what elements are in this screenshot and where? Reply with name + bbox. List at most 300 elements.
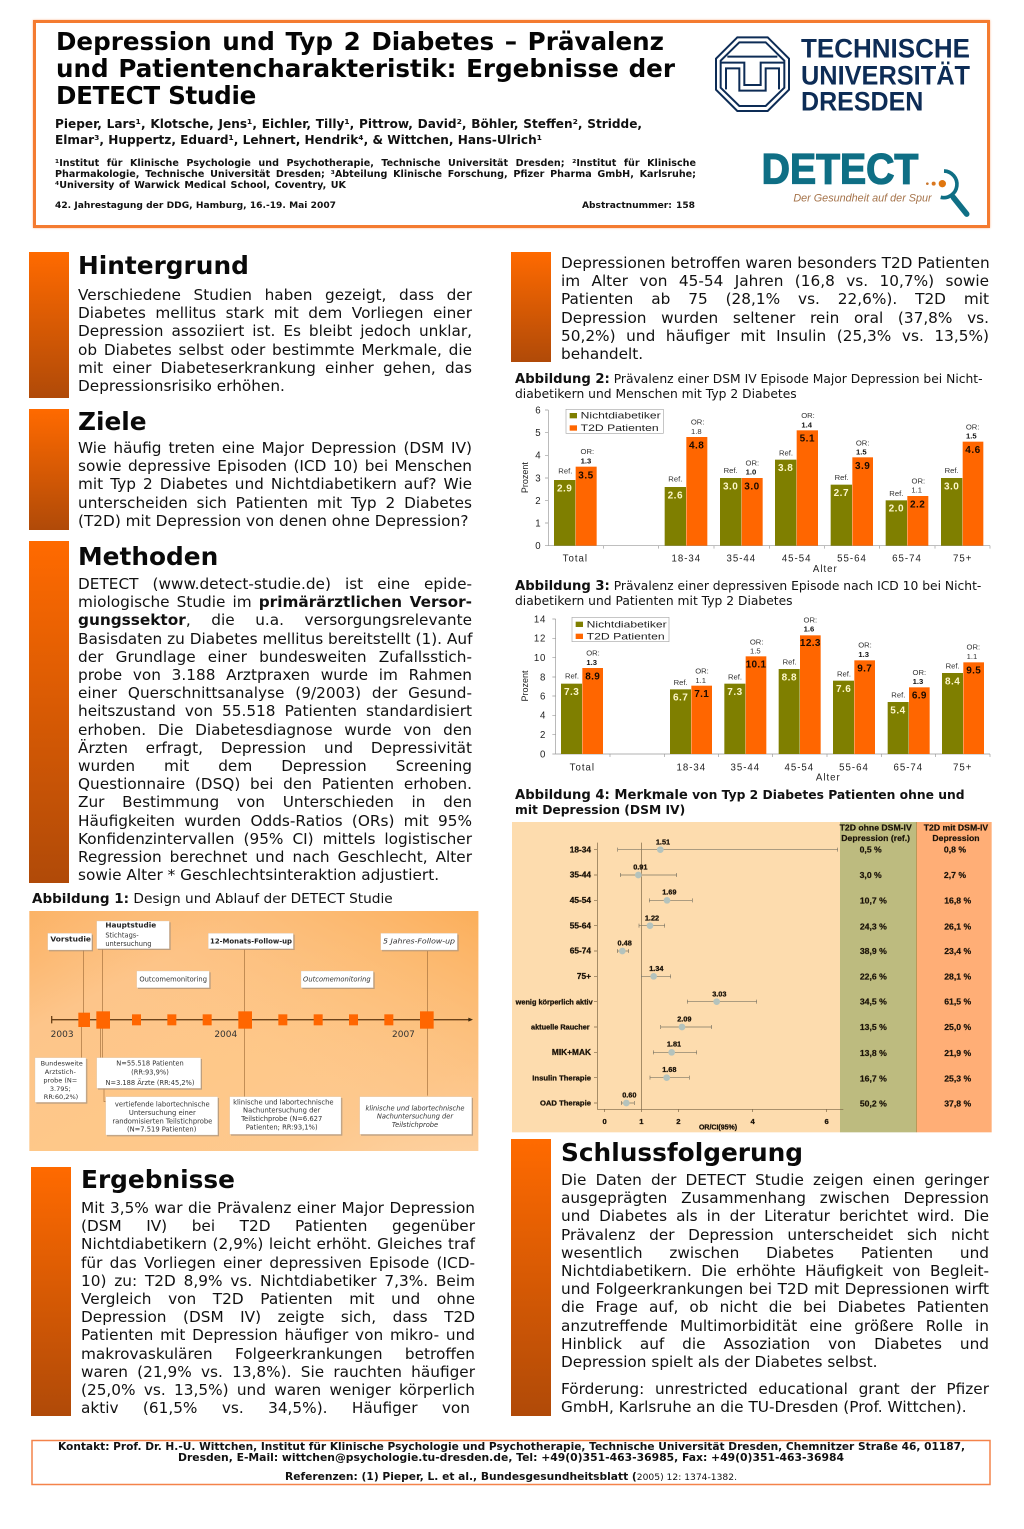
text: Hintergrund: Depression assoziiert ist. Es bleibt jedoch unklar, (78, 322, 472, 340)
column: T2D mit Depression: 37,8 % (944, 1099, 971, 1109)
bar chart: Abbildung 3: 8.9 (585, 671, 600, 682)
forest plot: Abbildung 4: 2.09 (677, 1014, 691, 1023)
text: Hintergrund: ob Diabetes selbst oder bestimmte Merkmale, die (78, 341, 472, 359)
bar chart: Abbildung 3: 1.6 (804, 625, 814, 634)
box: Hauptstudie (105, 921, 156, 948)
caption: Abbildung 3: Abbildung 3: Prävalenz einer depressiven Episode nach ICD 10 bei Nicht- (515, 579, 981, 594)
column: T2D mit Depression: 61,5 % (944, 997, 971, 1007)
text: Ergebnisse (81, 1199, 476, 1417)
text: Methoden: Ärzten erfragt, Depression und Depressivität (78, 739, 472, 757)
text: Hintergrund: Verschiedene Studien haben gezeigt, dass der (78, 286, 472, 304)
column: T2D ohne Depression: 0,5 % (860, 845, 882, 855)
box: vertiefende Untersuchung: randomisierten Teilstichprobe (112, 1117, 212, 1125)
column: T2D mit Depression: 25,3 % (944, 1073, 971, 1083)
text: Ziele: unterscheiden sich Patienten mit Typ 2 Diabetes (78, 494, 472, 512)
legend: Nichtdiabetiker (581, 411, 661, 421)
bar chart: Abbildung 3: 2 (540, 730, 546, 741)
box: klinische Nachuntersuchung (italic): Nachuntersuchung der (377, 1113, 454, 1121)
bar chart: Abbildung 3: 35-44 (730, 762, 760, 773)
bar chart: Abbildung 3: Ref. (891, 690, 905, 699)
bar chart: Abbildung 2: 3.0 (944, 481, 959, 492)
forest plot: Abbildung 4: 1.34 (649, 964, 664, 973)
text: Methoden: Regression berechnet und nach Geschlecht, Alter (78, 848, 472, 866)
column: T2D mit Depression: 0,8 % (944, 845, 966, 855)
bar chart: Abbildung 3: 45-54 (784, 762, 814, 773)
bar chart: Abbildung 3: OR: (804, 616, 817, 625)
forest plot: Abbildung 4: 18-34 (570, 844, 591, 854)
bar chart: Abbildung 2: Alter (813, 564, 838, 575)
authors: Elmar³, Huppertz, Eduard¹, Lehnert, Hendrik⁴, & Wittchen, Hans-Ulrich¹ (55, 132, 542, 146)
bar chart: Abbildung 2: 75+ (953, 554, 972, 565)
column: T2D mit Depression: 23,4 % (944, 946, 971, 956)
header panel (33, 20, 990, 228)
forest plot: Abbildung 4: 75+ (577, 971, 591, 981)
bar chart: Abbildung 3: OR: (695, 666, 709, 675)
text: Ergebnisse: (DSM IV) bei T2D Patienten gegenüber (81, 1217, 475, 1235)
bar chart: Abbildung 2: 2.2 (910, 499, 925, 510)
forest plot: Abbildung 4: 1.68 (662, 1065, 676, 1074)
box: Bundesweite Arztstichprobe: Arztstich- (45, 1068, 77, 1076)
bar chart: Abbildung 3: 12.3 (800, 638, 821, 649)
text: Schlussfolgerung: die Frage auf, ob nicht die bei Diabetes Patienten (561, 1298, 989, 1316)
text: Ziele: sowie depressive Episoden (ICD 10) bei Menschen (78, 457, 472, 475)
forest plot: Abbildung 4: 3.03 (712, 989, 726, 998)
bar chart: Abbildung 2: Ref. (558, 467, 572, 476)
logo: DETECT (762, 145, 970, 217)
bar chart: Abbildung 2: 1.3 (581, 456, 591, 465)
heading: Hintergrund: Hintergrund (78, 251, 249, 280)
box: 12-Monats-Follow-up: 12-Monats-Follow-up (210, 937, 292, 945)
logo: TU Dresden (715, 34, 970, 117)
text: Methoden: der Grundlage einer bundesweiten Zufallsstich- (78, 648, 472, 666)
bar chart: Abbildung 3: 8.4 (945, 676, 960, 687)
title: DETECT Studie (56, 81, 256, 110)
bar chart: Abbildung 2: OR: (746, 458, 759, 467)
text: Schlussfolgerung: Die Daten der DETECT Studie zeigen einen geringer (561, 1171, 989, 1189)
box: klinische Nachuntersuchung (italic) (365, 1104, 465, 1129)
forest plot: Abbildung 4: 1 (639, 1117, 644, 1126)
column: T2D ohne Depression: 3,0 % (860, 870, 882, 880)
box: Bundesweite Arztstichprobe: 3.795; (50, 1085, 71, 1093)
timeline axis: 2007 (392, 1030, 415, 1040)
text: Hintergrund: Depressionsrisiko erhöhen. (78, 377, 285, 395)
accent bar: Ergebnisse (31, 1167, 71, 1416)
text: Ziele: Wie häufig treten eine Major Depression (DSM IV) (78, 439, 472, 457)
column: T2D ohne Depression: 34,5 % (860, 997, 887, 1007)
text: Ziele: mit Typ 2 Diabetes und Nichtdiabetikern auf? Wie (78, 475, 472, 493)
bar chart: Abbildung 3: Ref. (946, 662, 960, 671)
forest plot: Abbildung 4: 1.81 (667, 1040, 681, 1049)
forest plot: Abbildung 4: 1.51 (656, 837, 670, 846)
bar chart: Abbildung 2: 3.8 (778, 463, 793, 474)
box: Bundesweite Arztstichprobe: probe (N= (43, 1077, 77, 1085)
bar chart: Abbildung 2: Ref. (835, 473, 849, 482)
text: Schlussfolgerung: wesentlich zwischen Diabetes Patienten und (561, 1244, 989, 1262)
text: Schlussfolgerung: und Diabetes als in der Literatur berichtet wird. Die (561, 1207, 989, 1225)
text: Ergebnisse: Depression (DSM IV) zeigte sich, dass T2D (81, 1308, 475, 1326)
forest plot: Abbildung 4: 0.60 (622, 1090, 636, 1099)
bar chart: Abbildung 3: 7.1 (694, 689, 709, 700)
text: Methoden: Basisdaten zu Diabetes mellitus bereitstellt (1). Auf (78, 630, 472, 648)
box: klinische Nachuntersuchung (233, 1098, 334, 1132)
bar chart: Abbildung 2: 1.5 (966, 432, 977, 441)
text: Schlussfolgerung: Hinblick auf die Assoziation von Diabetes und (561, 1335, 989, 1353)
text: Methoden: sowie Alter * Geschlechtsinteraktion adjustiert. (78, 866, 439, 884)
bar chart: Abbildung 2: 1.8 (691, 427, 702, 436)
bar chart: Abbildung 3: 7.3 (564, 687, 579, 698)
forest plot: Abbildung 4: 1.22 (645, 913, 659, 922)
bar chart: Abbildung 2: 5.1 (800, 434, 815, 445)
column: T2D ohne Depression: 13,8 % (860, 1048, 887, 1058)
bar chart: Abbildung 2: OR: (801, 411, 815, 420)
bar chart: Abbildung 3: 4 (540, 711, 546, 722)
heading: Ergebnisse: Ergebnisse (81, 1165, 235, 1194)
forest plot: Abbildung 4: 45-54 (570, 895, 591, 905)
bar chart: Abbildung 2: 18-34 (671, 554, 701, 565)
text: Methoden: einer Querschnittsanalyse (9/2003) der Gesund- (78, 684, 472, 702)
forest plot: Abbildung 4: 4 (751, 1117, 756, 1126)
column: T2D mit Depression: Depression (932, 833, 980, 843)
accent bar: Ergebnisse continued (511, 252, 551, 362)
forest plot: Abbildung 4: 0.91 (633, 862, 647, 871)
bar chart: Abbildung 2 (520, 405, 990, 575)
column: T2D ohne Depression: Depression (ref.) (841, 833, 910, 843)
column: T2D mit Depression: 28,1 % (944, 971, 971, 981)
column: T2D ohne Depression: 10,7 % (860, 895, 887, 905)
bar chart: Abbildung 2: OR: (691, 418, 704, 427)
forest plot: Abbildung 4: 35-44 (570, 870, 591, 880)
box: Bundesweite Arztstichprobe (41, 1060, 83, 1101)
bar chart: Abbildung 2: 3.0 (744, 481, 760, 492)
title (56, 27, 675, 110)
bar chart: Abbildung 3: Prozent (520, 670, 530, 702)
box: Bundesweite Arztstichprobe: RR:60,2%) (44, 1093, 78, 1101)
heading: Methoden: Methoden (78, 542, 218, 571)
box: vertiefende Untersuchung: (N=7.519 Patienten) (127, 1126, 197, 1134)
caption: Abbildung 4 (515, 788, 965, 817)
bar chart: Abbildung 3: 65-74 (893, 762, 923, 773)
text: Schlussfolgerung: und Folgeerkrankungen bei T2D mit Depressionen wirft (561, 1280, 989, 1298)
column: T2D ohne Depression (840, 823, 912, 1109)
text: Schlussfolgerung (561, 1171, 990, 1371)
forest plot: Abbildung 4: aktuelle Raucher (531, 1023, 590, 1032)
bar chart: Abbildung 2: 0 (535, 541, 541, 552)
column: T2D ohne Depression: 38,9 % (860, 946, 887, 956)
text: Hintergrund: mit einer Diabeteserkrankung einher gehen, das (78, 359, 472, 377)
box: N=55.518 Patienten: N=55.518 Patienten (116, 1060, 184, 1068)
forest plot: Abbildung 4 (512, 822, 992, 1132)
bar chart: Abbildung 3: Ref. (783, 658, 797, 667)
references: Referenzen: (1) Pieper, L. et al., Bundesgesundheitsblatt ( 2005) 12: 1374-1382. (285, 1471, 737, 1483)
text: Methoden: probe von 3.188 Arztpraxen wurde im Rahmen (78, 666, 472, 684)
bar chart: Abbildung 2: OR: (581, 447, 594, 456)
legend (572, 617, 669, 642)
caption: Abbildung 2 (515, 372, 983, 401)
affiliations (55, 158, 696, 191)
bar chart: Abbildung 2: Ref. (779, 448, 793, 457)
bar chart: Abbildung 3: 1.3 (586, 658, 597, 667)
text: Hintergrund (78, 286, 472, 395)
bar chart: Abbildung 3: Ref. (728, 672, 742, 681)
contact: Kontakt: Prof. Dr. H.-U. Wittchen, Institut für Klinische Psychologie und Psychotherapie, Technische Universität Dresden, Chemnitzer Straße 46, 01187, (58, 1441, 965, 1453)
forest plot: Abbildung 4: wenig körperlich aktiv (515, 997, 594, 1006)
bar chart: Abbildung 2: Total (563, 554, 588, 565)
accent bar: Schlussfolgerung (511, 1139, 551, 1416)
footer panel (31, 1440, 991, 1486)
text: Schlussfolgerung: Nichtdiabetikern. Die erhöhte Häufigkeit von Begleit- (561, 1262, 989, 1280)
odds ratio markers (619, 846, 720, 1106)
bar chart: Abbildung 2: 65-74 (892, 554, 922, 565)
bar chart: Abbildung 2: OR: (966, 422, 979, 431)
affiliations: ⁴University of Warwick Medical School, Coventry, UK (55, 180, 346, 191)
bar chart: Abbildung 3: 6.9 (912, 691, 927, 702)
bar chart: Abbildung 3: OR: (750, 637, 763, 646)
bar chart: Abbildung 2: Ref. (724, 466, 738, 475)
box: N=55.518 Patienten: (RR:93,9%) (131, 1068, 169, 1076)
authors (55, 117, 642, 146)
bar chart: Abbildung 2: 3.0 (723, 481, 738, 492)
bar chart: Abbildung 2: 3 (535, 473, 541, 484)
abstract number: Abstractnummer: 158 (582, 201, 695, 211)
text: Ergebnisse: aktiv (61,5% vs. 34,5%). Häufiger von (81, 1399, 470, 1417)
column: T2D ohne Depression: 22,6 % (860, 971, 887, 981)
text: Methoden: DETECT (www.detect-studie.de) ist eine epide- (78, 575, 472, 593)
forest plot: Abbildung 4: 55-64 (570, 920, 591, 930)
bar chart: Abbildung 3: Ref. (674, 678, 688, 687)
box: 5 Jahres-Follow-up: 5 Jahres-Follow-up (383, 938, 456, 946)
text: Ergebnisse: Nichtdiabetikern (2,9%) leicht erhöht. Gleiches traf (81, 1235, 475, 1253)
text: Ergebnisse: für das Vorliegen einer depressiven Episode (ICD- (81, 1254, 475, 1272)
bar chart: Abbildung 3: OR: (967, 643, 980, 652)
text: Ergebnisse continued: behandelt. (561, 345, 643, 363)
bar chart: Abbildung 3: 55-64 (839, 762, 869, 773)
bar chart: Abbildung 2: Ref. (945, 466, 959, 475)
text: Ergebnisse: Patienten mit Depression häufiger von mikro- und (81, 1326, 475, 1344)
bar chart: Abbildung 3: 6 (540, 691, 546, 702)
affiliations: ¹Institut für Klinische Psychologie und Psychotherapie, Technische Universität Dresden; ²Institut für Klinische (55, 158, 696, 169)
bar chart: Abbildung 3: 5.4 (890, 705, 906, 716)
flow diagram: DETECT design timeline (29, 911, 478, 1151)
box: klinische Nachuntersuchung: Nachuntersuchung der (243, 1107, 321, 1115)
text: Schlussfolgerung: anzutreffende Multimorbidität eine größere Rolle in (561, 1317, 989, 1335)
column: T2D ohne Depression: 24,3 % (860, 921, 887, 931)
forest plot: Abbildung 4: 2 (676, 1117, 680, 1126)
forest plot: Abbildung 4: Insulin Therapie (532, 1073, 591, 1082)
column: T2D mit Depression: 16,8 % (944, 895, 971, 905)
box: klinische Nachuntersuchung: Teilstichprobe (N=6.627 (240, 1115, 322, 1123)
text: Ergebnisse: (25,0% vs. 13,5%) und waren weniger körperlich (81, 1381, 475, 1399)
contact: Dresden, E-Mail: wittchen@psychologie.tu-dresden.de, Tel: +49(0)351-463-36985, Fax: +49(0)351-463-36984 (178, 1452, 844, 1464)
text: Ergebnisse continued: 50,2%) und häufiger mit Insulin (25,3% vs. 13,5%) (561, 327, 989, 345)
bar chart: Abbildung 2: 1.4 (801, 420, 813, 429)
box: Outcomemonitoring (italic): Outcomemonitoring (303, 976, 371, 984)
bar chart: Abbildung 3: 9.5 (966, 666, 981, 677)
box: klinische Nachuntersuchung: klinische und labortechnische (233, 1098, 334, 1106)
bar chart: Abbildung 3: OR: (858, 641, 872, 650)
forest plot: Abbildung 4: 0 (603, 1117, 607, 1126)
bar chart: Abbildung 3: 14 (534, 614, 546, 625)
logo: TU Dresden: TECHNISCHE (801, 34, 970, 64)
bar chart: Abbildung 3: Total (570, 762, 595, 773)
bar chart: Abbildung 3: 1.3 (858, 650, 869, 659)
bar chart: Abbildung 3: 12 (534, 634, 546, 645)
text: Ergebnisse continued: im Alter von 45-54 Jahren (16,8 vs. 10,7%) sowie (561, 272, 989, 290)
bar chart: Abbildung 2: 35-44 (726, 554, 756, 565)
bar chart: Abbildung 3: 9.7 (857, 664, 872, 675)
box: vertiefende Untersuchung (112, 1101, 212, 1134)
text: Ergebnisse continued: Depressionen betroffen waren besonders T2D Patienten (561, 254, 990, 272)
timeline axis: 2003 (51, 1030, 74, 1040)
text: Ziele: (T2D) mit Depression von denen ohne Depression? (78, 512, 468, 530)
text: Ergebnisse continued (561, 254, 990, 363)
accent bar: Methoden (29, 541, 69, 883)
logo: TU Dresden: DRESDEN (801, 87, 923, 117)
text: Methoden: Häufigkeiten wurden Odds-Ratios (ORs) mit 95% (78, 812, 472, 830)
bar chart: Abbildung 3: 7.6 (836, 684, 851, 695)
text: Förderung: GmbH, Karlsruhe an die TU-Dresden (Prof. Wittchen). (561, 1398, 967, 1416)
logo: DETECT: DETECT (762, 145, 918, 193)
text: Methoden: heitszustand von 55.518 Patienten standardisiert (78, 702, 472, 720)
bar chart: Abbildung 3: Ref. (837, 669, 851, 678)
text: Methoden (78, 575, 473, 884)
forest plot: Abbildung 4: OR/CI(95%) (699, 1125, 737, 1132)
forest plot: Abbildung 4: 0.48 (618, 938, 632, 947)
text: Ergebnisse continued: Patienten ab 75 (28,1% vs. 22,6%). T2D mit (561, 290, 989, 308)
text: Schlussfolgerung: Depression spielt als der Diabetes selbst. (561, 1353, 877, 1371)
box: klinische Nachuntersuchung (italic): klinische und labortechnische (365, 1104, 465, 1112)
caption: Abbildung 3: diabetikern und Patienten mit Typ 2 Diabetes (515, 594, 793, 608)
box: klinische Nachuntersuchung (italic): Teilstichprobe (392, 1121, 438, 1129)
text: Methoden: erhoben. Die Diabetesdiagnose wurde von den (78, 721, 472, 739)
bar chart: Abbildung 3: 1.3 (913, 677, 923, 686)
bar chart: Abbildung 3: OR: (586, 649, 600, 658)
column: T2D ohne Depression: 50,2 % (860, 1099, 887, 1109)
bar chart: Abbildung 3: 1.5 (750, 647, 761, 656)
bar chart: Abbildung 2: 4.8 (689, 440, 704, 451)
timeline axis: 2004 (214, 1030, 238, 1040)
bar chart: Abbildung 3: 0 (540, 749, 546, 760)
caption: Abbildung 1: Abbildung 1: Design und Ablauf der DETECT Studie (32, 891, 393, 907)
bar chart: Abbildung 2: 3.9 (855, 461, 870, 472)
logo: DETECT: Der Gesundheit auf der Spur (793, 193, 933, 205)
bar chart: Abbildung 3: 10.1 (746, 660, 767, 671)
confidence intervals (617, 848, 838, 1105)
text: Förderung: Förderung: unrestricted educational grant der Pfizer (561, 1380, 989, 1398)
bar chart: Abbildung 2: 55-64 (837, 554, 867, 565)
box: vertiefende Untersuchung: Untersuchung einer (129, 1109, 196, 1117)
box: Hauptstudie: Hauptstudie (105, 921, 156, 930)
authors: Pieper, Lars¹, Klotsche, Jens¹, Eichler, Tilly¹, Pittrow, David², Böhler, Steffen², Stridde, (55, 117, 642, 131)
bar chart: Abbildung 3: 1.1 (967, 652, 977, 661)
bar chart: Abbildung 2: 3.5 (578, 470, 594, 481)
caption: Abbildung 3 (515, 579, 981, 608)
accent bar: Hintergrund (29, 252, 69, 398)
logo: TU Dresden: UNIVERSITÄT (801, 60, 970, 90)
bar chart: Abbildung 2: 45-54 (782, 554, 812, 565)
affiliations: Pharmakologie, Technische Universität Dresden; ³Abteilung Klinische Forschung, Pfizer Pharma GmbH, Karlsruhe; (55, 169, 696, 180)
forest plot: Abbildung 4: 65-74 (570, 946, 591, 956)
text: Methoden: wurden mit dem Depression Screening (78, 757, 472, 775)
text: Ziele (78, 439, 472, 530)
forest plot: Abbildung 4: OAD Therapie (540, 1099, 591, 1108)
text: Ergebnisse: 10) zu: T2D 8,9% vs. Nichtdiabetiker 7,3%. Beim (81, 1272, 475, 1290)
box: Bundesweite Arztstichprobe: Bundesweite (41, 1060, 83, 1068)
caption: Abbildung 4: mit Depression (DSM IV) (515, 803, 685, 817)
text: Ergebnisse: waren (21,9% vs. 13,8%). Sie rauchten häufiger (81, 1363, 475, 1381)
bar chart: Abbildung 2: OR: (856, 438, 869, 447)
bar chart: Abbildung 2: 1.5 (856, 448, 867, 457)
heading: Ziele: Ziele (78, 407, 147, 436)
column: T2D mit Depression (924, 823, 988, 1109)
heading: Schlussfolgerung: Schlussfolgerung (561, 1138, 803, 1167)
bar chart: Abbildung 2: 2.6 (668, 490, 683, 501)
bar chart: Abbildung 2: Prozent (520, 462, 530, 493)
text: Methoden: Questionnaire (DSQ) bei den Patienten erhoben. (78, 775, 472, 793)
box: Hauptstudie: Stichtags- (105, 932, 139, 940)
title: und Patientencharakteristik: Ergebnisse der (56, 54, 675, 83)
text: Hintergrund: Diabetes mellitus stark mit dem Vorliegen einer (78, 304, 472, 322)
bar chart: Abbildung 2: 4 (535, 451, 541, 462)
bar chart: Abbildung 2: Ref. (889, 489, 903, 498)
box: N=55.518 Patienten (106, 1060, 195, 1087)
bar chart: Abbildung 3: 6.7 (673, 693, 688, 704)
legend: T2D Patienten (581, 423, 659, 433)
bar chart: Abbildung 3: OR: (913, 668, 926, 677)
text: Ergebnisse: Mit 3,5% war die Prävalenz einer Major Depression (81, 1199, 475, 1217)
column: T2D mit Depression: T2D mit DSM-IV (924, 823, 988, 833)
bar chart: Abbildung 3: 7.3 (727, 687, 743, 698)
bar chart: Abbildung 3: Alter (816, 773, 841, 784)
bar chart: Abbildung 2: 2.0 (889, 504, 904, 515)
bar chart: Abbildung 2: 5 (535, 428, 541, 439)
bar chart: Abbildung 2: 1 (535, 518, 541, 529)
text: Förderung (561, 1380, 990, 1416)
title: Depression und Typ 2 Diabetes – Prävalenz (56, 27, 664, 56)
bar chart: Abbildung 3 (520, 614, 990, 784)
bar chart: Abbildung 2: 1.0 (746, 468, 756, 477)
bar chart: Abbildung 2: OR: (912, 477, 925, 486)
text: Methoden: Konfidenzintervallen (95% CI) mittels logistischer (78, 830, 472, 848)
text: Ergebnisse: makrovaskulären Folgeerkrankungen betroffen (81, 1345, 475, 1363)
timeline axis (51, 1011, 473, 1040)
bar chart: Abbildung 2: 1.1 (911, 486, 922, 495)
caption: Abbildung 4: Abbildung 4: Merkmale von Typ 2 Diabetes Patienten ohne und (515, 788, 965, 803)
bar chart: Abbildung 2: 2.9 (557, 483, 572, 494)
column: T2D ohne Depression: 13,5 % (860, 1022, 887, 1032)
box: Outcomemonitoring: Outcomemonitoring (139, 976, 207, 984)
bar chart: Abbildung 2: 2 (535, 496, 541, 507)
bar chart: Abbildung 2: 4.6 (965, 445, 981, 456)
text: Ergebnisse continued: Depression wurden seltener rein oral (37,8% vs. (561, 309, 989, 327)
text: Schlussfolgerung: Prävalenz der Depression unterscheidet sich nicht (561, 1226, 989, 1244)
forest plot: Abbildung 4: MIK+MAK (552, 1047, 591, 1057)
caption: Abbildung 2: diabetikern und Menschen mit Typ 2 Diabetes (515, 387, 797, 401)
bar chart: Abbildung 3: 18-34 (676, 762, 706, 773)
bar chart: Abbildung 2: 6 (535, 405, 541, 416)
text: Methoden: gungssektor, die u.a. versorgungsrelevante (78, 611, 472, 629)
bar chart: Abbildung 2: 2.7 (834, 488, 849, 499)
column: T2D mit Depression: 21,9 % (944, 1048, 971, 1058)
accent bar: Ziele (29, 409, 69, 530)
legend: T2D Patienten (587, 631, 665, 641)
column: T2D mit Depression: 26,1 % (944, 921, 971, 931)
legend: Nichtdiabetiker (587, 619, 667, 629)
column: T2D mit Depression: 25,0 % (944, 1022, 971, 1032)
conference line: 42. Jahrestagung der DDG, Hamburg, 16.-19. Mai 2007 (55, 201, 336, 211)
legend (566, 409, 663, 433)
bar chart: Abbildung 3: 10 (534, 653, 546, 664)
box: N=55.518 Patienten: N=3.188 Ärzte (RR:45,2%) (106, 1078, 195, 1087)
